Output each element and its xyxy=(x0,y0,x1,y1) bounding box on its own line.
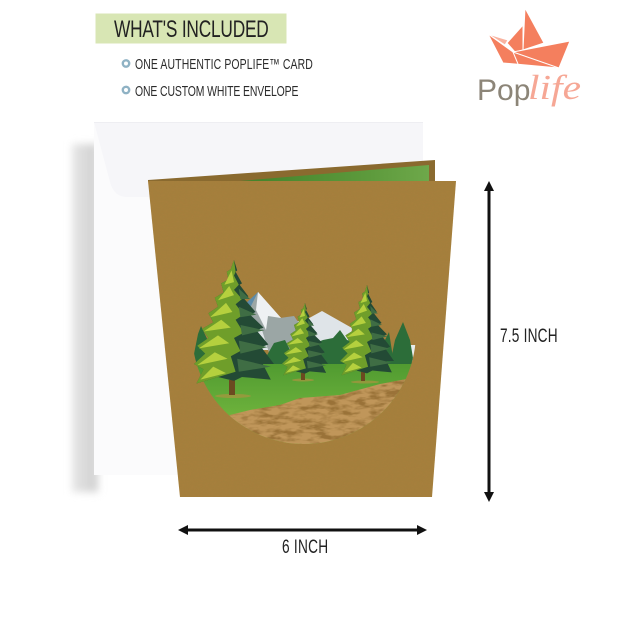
dirt path xyxy=(230,379,406,444)
card back panel xyxy=(148,160,435,182)
infographic canvas xyxy=(70,10,580,553)
heading: what's included: WHAT'S INCLUDED xyxy=(114,16,269,43)
label: 7.5 inch: 7.5 INCH xyxy=(500,325,558,347)
envelope xyxy=(94,122,423,475)
list of included items xyxy=(123,56,313,99)
tree trunks xyxy=(229,368,365,395)
mountains xyxy=(245,292,352,356)
label: 6 inch: 6 INCH xyxy=(282,536,328,558)
logo wordmark life: life xyxy=(528,68,581,107)
ground: grass meadow xyxy=(190,322,420,447)
card front panel xyxy=(148,181,456,497)
card inner green page xyxy=(228,165,429,182)
envelope flap xyxy=(94,122,423,197)
item: white envelope: ONE CUSTOM WHITE ENVELOPE xyxy=(135,83,298,99)
arrow: height dimension xyxy=(484,181,494,502)
greeting card xyxy=(148,160,456,497)
envelope shadow xyxy=(72,144,98,492)
arrow: width dimension xyxy=(178,525,427,535)
icon: origami boat xyxy=(488,8,570,68)
distant tree line xyxy=(192,322,414,364)
trees mid-ground xyxy=(194,260,274,384)
envelope body xyxy=(94,122,423,475)
pop-up forest scene xyxy=(190,260,420,450)
tree shadows on grass xyxy=(215,378,379,398)
item: poplife card: ONE AUTHENTIC POPLIFE™ CARD xyxy=(135,56,313,72)
logo wordmark pop: Pop xyxy=(477,74,530,107)
logo: poplife xyxy=(477,8,581,107)
